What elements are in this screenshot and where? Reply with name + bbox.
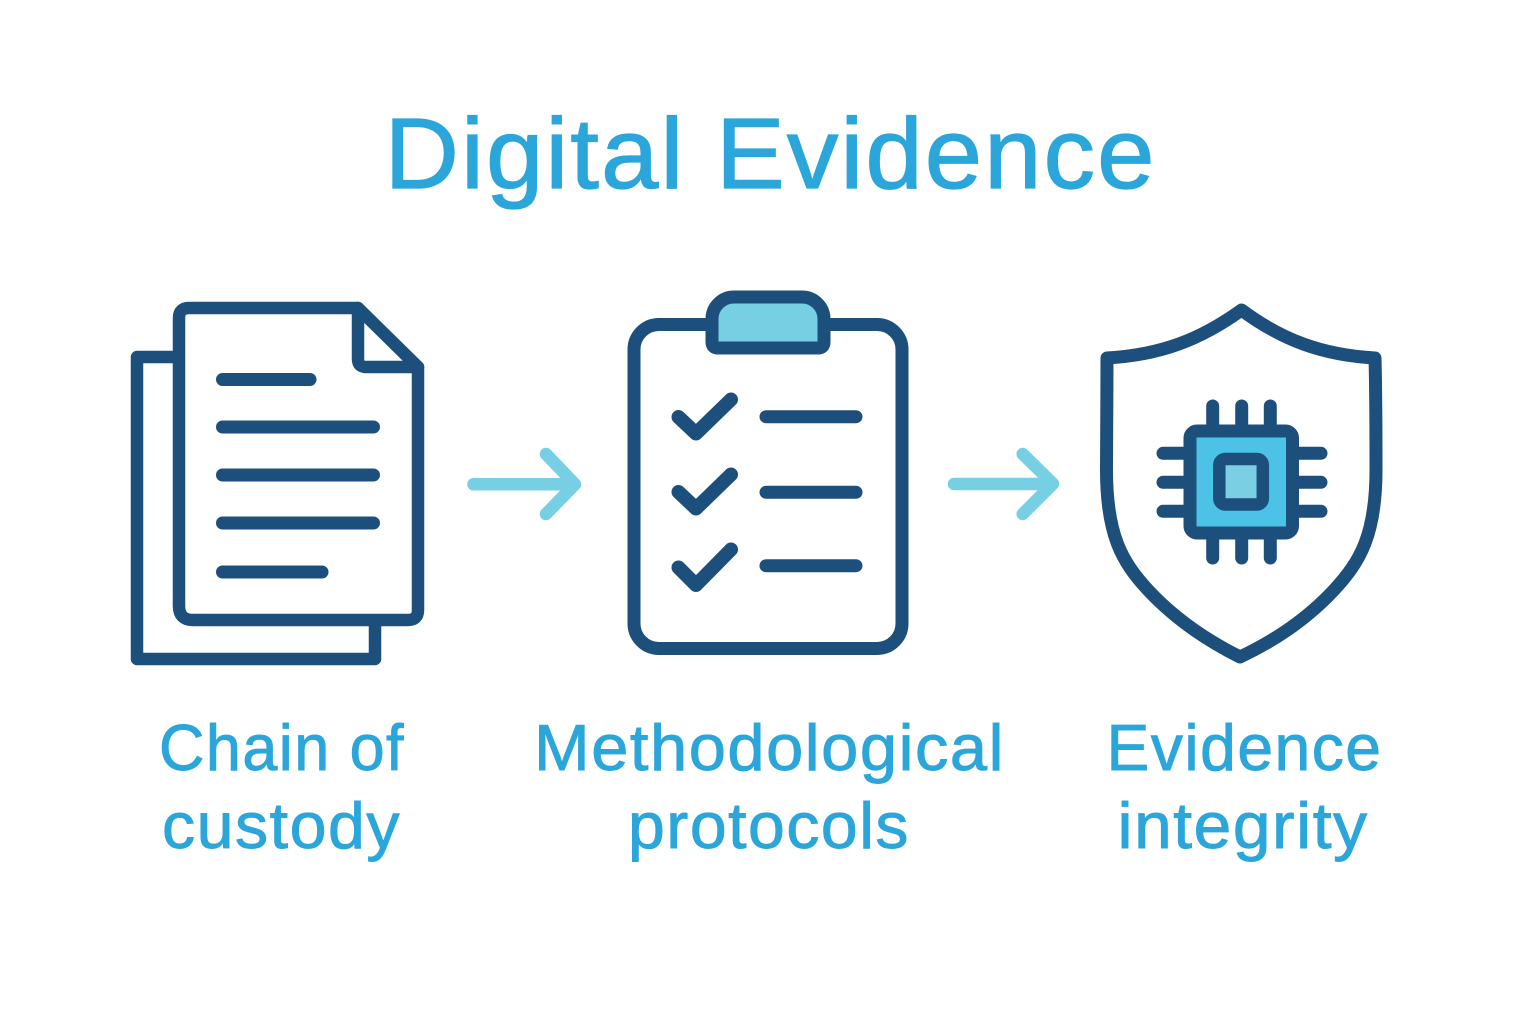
label: evidence integrity: Evidence	[1106, 711, 1382, 784]
arrow: documents to clipboard	[474, 454, 575, 514]
icon: clipboard checklist	[634, 297, 902, 648]
label: evidence integrity	[1106, 711, 1382, 862]
label: chain of custody: custody	[162, 789, 401, 862]
label: methodological protocols: protocols	[628, 789, 910, 862]
arrow: clipboard to shield	[954, 454, 1053, 514]
label: evidence integrity: integrity	[1118, 789, 1368, 862]
label: chain of custody: Chain of	[159, 711, 405, 784]
icon: shield with chip	[1106, 310, 1376, 657]
label: methodological protocols: Methodological	[534, 711, 1005, 784]
label: methodological protocols	[534, 711, 1005, 862]
icon: stacked documents	[137, 308, 418, 659]
label: chain of custody	[159, 711, 405, 862]
title: Digital Evidence	[384, 98, 1156, 210]
